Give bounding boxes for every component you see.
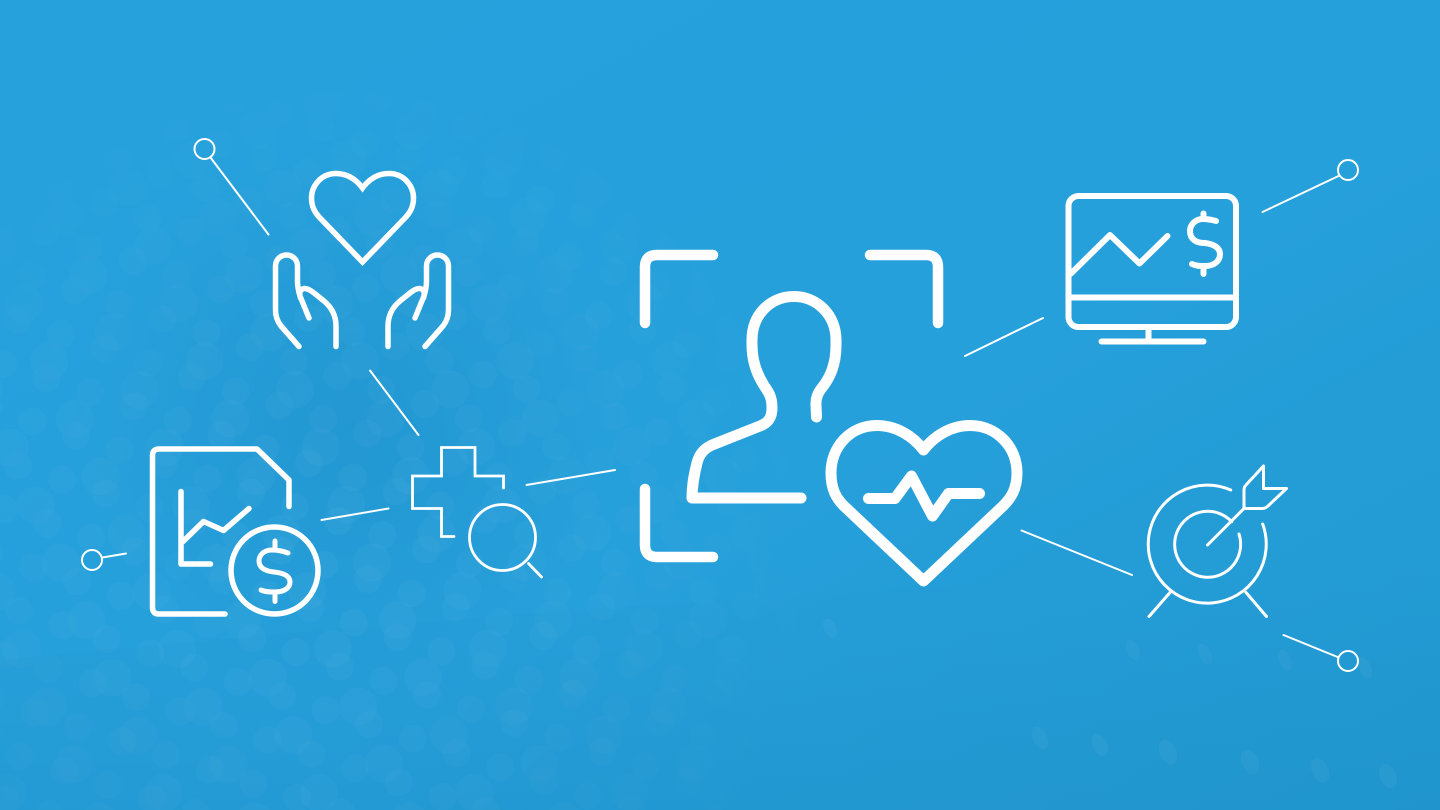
arrow shaft	[1208, 508, 1244, 545]
screen divider	[1069, 294, 1236, 300]
icon: small heart	[312, 174, 414, 262]
icon: hands holding heart	[276, 174, 448, 346]
icon: scan frame brackets	[645, 255, 938, 557]
icon: person silhouette	[692, 296, 836, 498]
inner ring	[1175, 511, 1241, 577]
magnifier lens	[470, 504, 536, 570]
arrow fletching	[1244, 466, 1286, 508]
background	[4, 200, 1440, 810]
document outline	[152, 449, 289, 614]
icon: medical cross with magnifier	[412, 448, 542, 577]
stand	[1102, 327, 1204, 342]
dollar symbol	[1190, 214, 1220, 274]
icon: financial document	[152, 449, 318, 614]
connector lines	[322, 318, 1132, 575]
icon: right hand	[388, 255, 448, 346]
icon: target with arrow	[1148, 466, 1286, 616]
screen	[1068, 196, 1236, 327]
outer ring	[1148, 485, 1266, 603]
chart axes and trend	[181, 492, 249, 564]
icon: heart with pulse	[831, 426, 1017, 581]
pulse line	[868, 476, 980, 516]
node: left	[82, 550, 126, 570]
node: top left	[194, 139, 268, 234]
icon: left hand	[276, 255, 336, 346]
target legs	[1149, 592, 1266, 616]
magnifier handle	[528, 564, 542, 577]
heart outline	[831, 426, 1017, 581]
icon: monitor with chart and dollar	[1068, 196, 1236, 342]
dollar coin	[231, 527, 318, 614]
node: bottom right	[1284, 635, 1358, 671]
cross	[412, 448, 504, 536]
trend line	[1071, 235, 1168, 274]
node: top right	[1262, 160, 1358, 212]
dollar symbol	[259, 541, 290, 602]
